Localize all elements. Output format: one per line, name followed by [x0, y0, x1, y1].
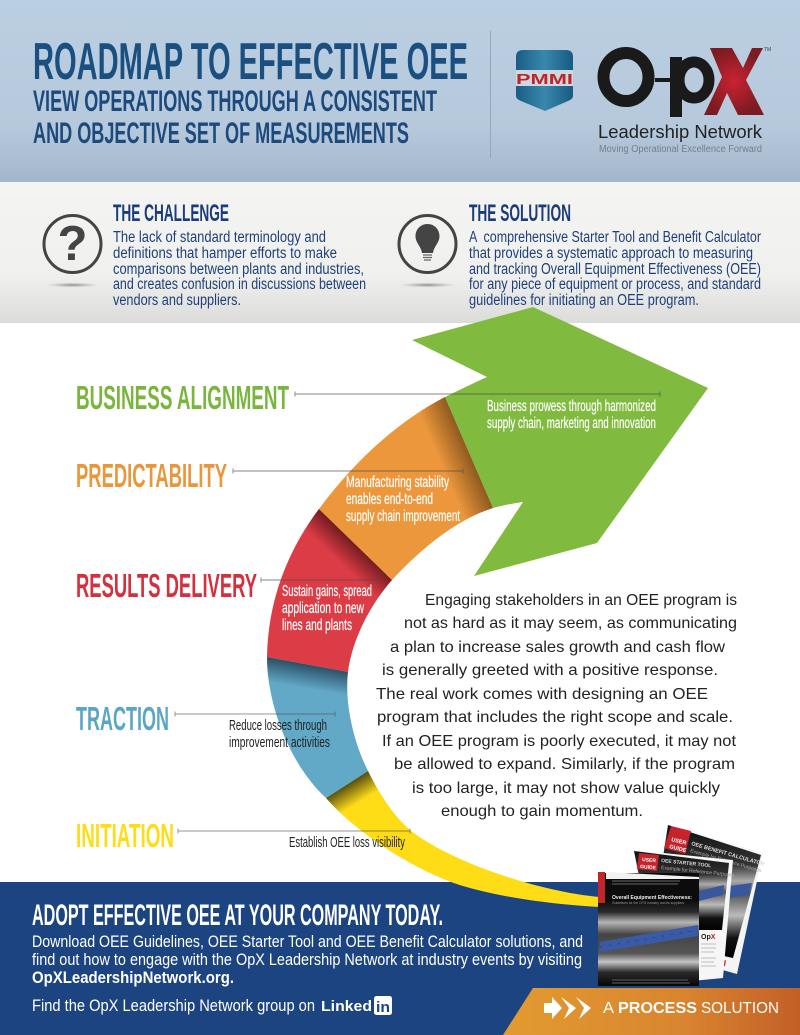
roadmap arrow [267, 307, 708, 907]
label: predictability: Manufacturing stability [346, 474, 449, 491]
text: central paragraph [376, 592, 737, 820]
text: challenge description: comparisons between plants and industries, [113, 261, 364, 278]
icon: question mark [44, 216, 101, 288]
label: traction: improvement activities [229, 734, 330, 751]
text: a process solution: A [603, 1000, 614, 1017]
logo: OpX Leadership Network: Moving Operational Excellence Forward [599, 144, 762, 155]
logo: PMMI: PMMI [516, 71, 573, 88]
text: LinkedIn line: Linked [321, 998, 372, 1015]
label: predictability: supply chain improvement [346, 508, 460, 525]
text: challenge description: and creates confusion in discussions between [113, 276, 366, 293]
label: traction [76, 700, 335, 751]
label: business alignment: Business prowess through harmonized [487, 398, 656, 415]
label: traction: Reduce losses through [229, 717, 327, 734]
label: business alignment [76, 379, 660, 432]
icon: question mark: ? [58, 217, 87, 271]
segment: business alignment (green arrowhead) [412, 307, 708, 576]
title: ROADMAP TO EFFECTIVE OEE [33, 33, 468, 91]
text: central paragraph: enough to gain momentum. [441, 803, 643, 820]
label: initiation [76, 817, 410, 854]
text: a process solution [603, 1000, 779, 1017]
label: results delivery: application to new [282, 600, 365, 617]
label: business alignment: BUSINESS ALIGNMENT [76, 379, 289, 416]
booklet: starter tool: GUIDE [640, 864, 657, 871]
booklet: benefit calculator: GUIDE [669, 844, 687, 854]
text: central paragraph: be allowed to expand. Similarly, if the program [394, 756, 735, 773]
label: initiation: INITIATION [76, 817, 174, 854]
logo: OpX Leadership Network: Leadership Network [598, 122, 763, 142]
booklet: OEE guidelines: Guidelines for the CPG industry and its suppliers [612, 900, 684, 905]
booklet: starter tool: USER [642, 857, 657, 864]
panel: challenge and solution band [0, 182, 800, 323]
booklet: OEE guidelines [598, 872, 699, 986]
text: challenge description [113, 229, 366, 309]
booklet: benefit calculator: OEE BENEFIT CALCULATOR [690, 841, 765, 868]
text: central paragraph: is generally greeted with a positive response. [382, 662, 718, 679]
label: predictability: enables end-to-end [346, 491, 433, 508]
banner: a process solution [503, 988, 800, 1035]
heading: the challenge: THE CHALLENGE [113, 200, 229, 227]
subtitle: AND OBJECTIVE SET OF MEASUREMENTS [33, 117, 409, 150]
logo: OpX Leadership Network [598, 47, 771, 155]
label: results delivery: Sustain gains, spread [282, 583, 372, 600]
text: challenge description: definitions that hamper efforts to make [113, 245, 337, 262]
text: central paragraph: Engaging stakeholders in an OEE program is [425, 592, 737, 609]
icon: triple arrows [544, 997, 591, 1019]
booklet: benefit calculator: USER [671, 837, 687, 847]
label: results delivery: lines and plants [282, 617, 352, 634]
logo: OpX Leadership Network: TM [764, 47, 771, 53]
subtitle [33, 85, 437, 150]
label: results delivery [76, 567, 377, 634]
text: central paragraph: If an OEE program is poorly executed, it may not [382, 733, 737, 750]
text: solution description: guidelines for initiating an OEE program. [469, 292, 699, 309]
booklet: starter tool: OEE STARTER TOOL [661, 858, 712, 869]
text: LinkedIn line: Find the OpX Leadership Network group on [32, 996, 315, 1015]
booklet: starter tool: Example for Reference Purposes [661, 865, 735, 879]
text: central paragraph: a plan to increase sales growth and cash flow [390, 639, 725, 656]
text: download instructions: OpXLeadershipNetwork.org. [32, 968, 234, 987]
heading: the solution: THE SOLUTION [469, 200, 571, 227]
segment: predictability (orange) [319, 397, 493, 580]
label: predictability: PREDICTABILITY [76, 457, 227, 494]
panel: header [0, 0, 800, 182]
label: traction: TRACTION [76, 700, 169, 737]
segment: results delivery (red) [267, 509, 392, 672]
image: stacked user guide booklets [598, 825, 765, 986]
booklet: OEE guidelines: Overall Equipment Effectiveness: [612, 895, 692, 901]
label: predictability [76, 457, 463, 525]
label: initiation: Establish OEE loss visibility [289, 834, 405, 851]
subtitle: VIEW OPERATIONS THROUGH A CONSISTENT [33, 85, 437, 118]
label: business alignment: supply chain, marketing and innovation [487, 415, 656, 432]
icon: light bulb [399, 216, 456, 288]
text: solution description [469, 229, 761, 309]
panel: footer [0, 882, 800, 1035]
text: download instructions: Download OEE Guidelines, OEE Starter Tool and OEE Benefit Calculator solutions, and [32, 932, 583, 951]
text: LinkedIn line: in [376, 999, 390, 1016]
text: central paragraph: is too large, it may not show value quickly [412, 780, 720, 797]
heading: call to action: ADOPT EFFECTIVE OEE AT YOUR COMPANY TODAY. [32, 899, 443, 932]
segment: initiation (yellow) [326, 771, 600, 907]
text: a process solution: SOLUTION [701, 1000, 779, 1017]
logo: PMMI [516, 50, 573, 111]
booklet: benefit calculator [650, 825, 765, 974]
text: download instructions [32, 932, 583, 987]
booklet: starter tool [634, 850, 735, 985]
label: results delivery: RESULTS DELIVERY [76, 567, 257, 604]
text: challenge description: vendors and suppliers. [113, 292, 241, 309]
text: central paragraph: not as hard as it may seem, as communicating [404, 615, 737, 632]
text: a process solution: PROCESS [618, 1000, 697, 1017]
booklet: starter tool: OpX [701, 934, 716, 941]
text: download instructions: find out how to engage with the OpX Leadership Network at industry events by visiting [32, 950, 582, 969]
segment: traction (blue) [267, 657, 368, 798]
booklet: benefit calculator: Example for Reference Purposes [689, 848, 762, 874]
text: central paragraph: The real work comes with designing an OEE [376, 686, 708, 703]
text: challenge description: The lack of standard terminology and [113, 229, 326, 246]
text: central paragraph: program that includes the right scope and scale. [377, 709, 733, 726]
